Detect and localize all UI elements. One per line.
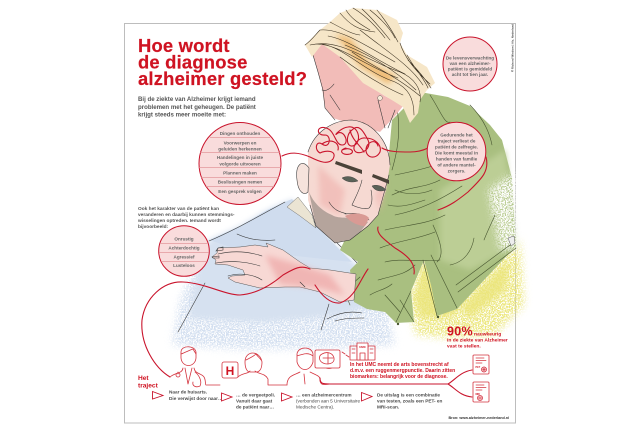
memory problems circle: Plannen maken <box>223 170 257 175</box>
UMC text: d.m.v. een ruggenmergpunctie. Daarin zitten <box>350 368 455 374</box>
life expectancy circle <box>443 37 497 91</box>
icon: brain monitor <box>315 350 349 368</box>
behaviour text: wisselingen optreden. Iemand wordt <box>137 218 221 224</box>
shirt shoulder top <box>209 199 352 262</box>
intro text: Bij de ziekte van Alzheimer krijgt iemand <box>138 96 256 103</box>
man ear <box>297 163 309 194</box>
jacket seams and folds <box>348 95 516 325</box>
step 4: MRI-scan. <box>377 404 399 410</box>
90 percent statistic: vast te stellen. <box>447 344 481 350</box>
het traject heading: traject <box>138 382 159 390</box>
blue shirt core <box>190 199 372 322</box>
icon: hospital H: H <box>226 364 234 378</box>
intro text: problemen met het geheugen. De patiënt <box>138 104 256 111</box>
icon: two specialists <box>287 348 335 385</box>
90 percent statistic: in de ziekte van Alzheimer <box>447 338 508 344</box>
care partner circle <box>427 122 486 181</box>
hand redness <box>265 255 345 295</box>
finger lines <box>212 247 305 287</box>
step 3: (verbonden aan 5 Universitaire <box>296 398 360 404</box>
het traject heading: Het <box>138 375 149 382</box>
memory problems circle: geluiden herkennen <box>218 147 262 152</box>
care partner circle: traject verliest de <box>438 138 476 144</box>
step 3: … een alzheimercentrum <box>296 392 352 398</box>
intro text <box>138 96 256 118</box>
page frame <box>124 24 516 423</box>
title: de diagnose <box>138 52 248 72</box>
step 4: De uitslag is een combinatie <box>377 392 440 398</box>
life expectancy circle: van een alzheimer- <box>449 61 491 66</box>
step 3 <box>282 392 360 410</box>
care partner circle: handen van familie <box>436 156 478 162</box>
red brain scribble <box>282 127 428 162</box>
life expectancy circle: De levensverwachting <box>446 56 494 60</box>
jacket highlight <box>440 150 516 270</box>
red trajectory line <box>142 157 487 377</box>
behaviour text: veranderen en daarbij kunnen stemmings- <box>138 212 235 218</box>
behaviour circle: Agressief <box>174 254 195 259</box>
photo credit: © Richard Wisdom | Alz. Nederland <box>510 24 514 72</box>
step 3: Medische Centra). <box>296 404 334 410</box>
man outline and features <box>308 120 390 243</box>
90 percent statistic: 90% <box>447 324 473 338</box>
hair strands <box>305 8 431 115</box>
behaviour text <box>137 206 235 230</box>
collar <box>287 197 316 228</box>
icon: PET scan document <box>473 355 489 374</box>
icon: UMC building <box>350 343 375 360</box>
step 2: de patiënt naar… <box>236 404 274 410</box>
icon: PET scan document: PET <box>476 366 481 369</box>
step 2: … de vergeetpoli. <box>236 392 275 398</box>
step 2: Vanuit daar gaat <box>236 398 273 404</box>
blue shirt spray edge <box>172 245 395 350</box>
man beard <box>309 192 368 243</box>
behaviour circle: Onrustig <box>174 237 194 242</box>
memory problems circle: Voorwerpen en <box>224 140 257 145</box>
care partner circle: Gedurende het <box>440 132 473 138</box>
title: alzheimer gesteld? <box>138 68 307 89</box>
het traject heading <box>138 375 159 390</box>
hair orange tint <box>335 34 396 84</box>
icon: doctor <box>170 347 220 387</box>
90 percent statistic: nauwkeurig <box>474 332 501 338</box>
woman blonde hair <box>305 8 435 123</box>
UMC text: biomarkers: belangrijk voor de diagnose. <box>350 374 448 380</box>
icon: hospital H <box>222 362 238 378</box>
intro text: krijgt steeds meer moeite met: <box>138 112 226 118</box>
memory problems circle: Dingen onthouden <box>220 131 260 136</box>
icon: UMC building: UMC <box>359 345 367 349</box>
step 4: van testen, zoals een PET- en <box>377 398 443 404</box>
yellow wash with spray edge <box>408 240 524 338</box>
behaviour text: Ook het karakter van de patiënt kan <box>138 206 219 212</box>
shirt folds <box>178 202 364 332</box>
behaviour text: bijvoorbeeld: <box>138 224 169 230</box>
man head <box>308 120 390 243</box>
life expectancy circle: patiënt is gemiddeld <box>448 66 492 72</box>
memory problems circle <box>199 122 281 204</box>
care partner circle: patiënt de zelfregie. <box>435 144 478 150</box>
icon: MRI scan document: MRI <box>476 393 480 396</box>
life expectancy circle: acht tot tien jaar. <box>452 72 488 77</box>
behaviour circle: Achterdochtig <box>168 245 200 250</box>
white spray on jacket edge <box>488 170 520 250</box>
memory problems circle: volgorde uitvoeren <box>219 161 261 166</box>
title <box>138 35 307 89</box>
icon: MRI scan document <box>473 382 489 402</box>
step 1: Naar de huisarts. <box>169 390 207 394</box>
90 percent statistic <box>447 324 508 350</box>
behaviour circle: Lusteloos <box>173 263 195 268</box>
patient hand and arm <box>212 243 356 302</box>
man cheek blush <box>318 165 386 215</box>
red line to test results <box>320 370 472 397</box>
step 1 <box>152 390 223 401</box>
UMC text <box>350 362 455 380</box>
care partner circle: of andere mantel- <box>437 162 476 168</box>
woman face and neck <box>313 44 403 132</box>
step 4 <box>362 392 443 410</box>
icon: geriatrician woman <box>238 353 287 385</box>
care partner circle: Die komt meestal in <box>435 150 478 156</box>
behaviour circle <box>159 226 209 276</box>
green jacket <box>340 92 516 323</box>
UMC text: In het UMC neemt de arts bovenstrecht af <box>350 362 449 368</box>
step 2 <box>222 392 275 410</box>
step 1: Die verwijst door naar… <box>169 396 223 401</box>
care partner circle: zorgers. <box>448 168 465 174</box>
illustration: hug between patient and partner <box>172 8 524 350</box>
yellow wash core <box>414 262 510 318</box>
memory problems circle: Een gesprek volgen <box>218 189 262 194</box>
title: Hoe wordt <box>138 35 230 56</box>
memory problems circle: Handelingen in juiste <box>217 155 264 160</box>
source: Bron: www.alzheimer-nederland.nl <box>448 416 509 420</box>
row dividers <box>199 138 281 187</box>
memory problems circle: Beslissingen nemen <box>218 179 262 184</box>
